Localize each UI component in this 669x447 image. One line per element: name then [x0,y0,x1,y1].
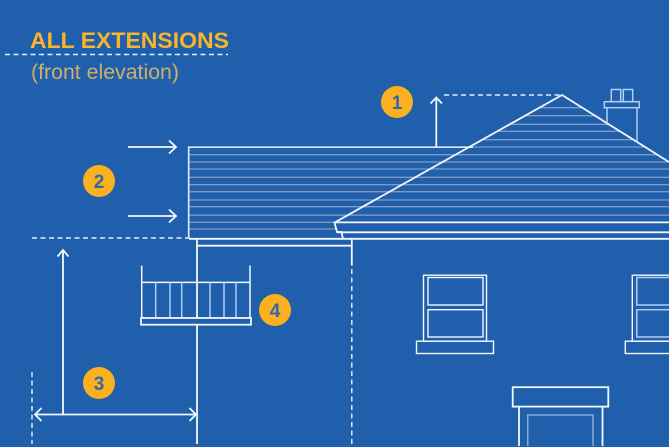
title underline [5,54,228,56]
window right [625,275,669,354]
arrow: upper [128,140,176,154]
dashed boundary line [31,372,33,444]
title: ALL EXTENSIONS [30,28,229,53]
dashed ridge height line [444,94,562,96]
dashed wall line [351,269,353,447]
badge 2 [83,165,115,197]
roof cladding lines [189,108,669,229]
subtitle: (front elevation) [31,61,179,84]
badge 4: 4 [270,301,281,322]
extension roof outline [189,147,473,238]
badge 3: 3 [94,374,104,395]
balcony [141,266,251,325]
badge 3 [83,367,115,399]
badge 2: 2 [94,172,104,193]
badge 1: 1 [392,93,403,114]
front door [513,387,608,446]
main roof outline and gutter [334,95,669,239]
house wall lines [189,239,669,444]
arrow: vertical extension height [58,250,68,414]
chimney [604,90,639,142]
arrow: lower [128,210,176,222]
badge 1 [381,86,413,118]
window left [416,275,494,354]
dashed eaves line [32,237,189,239]
badge 4 [259,294,291,326]
arrow: height up [430,98,442,147]
arrow: horizontal extension width [35,408,196,421]
